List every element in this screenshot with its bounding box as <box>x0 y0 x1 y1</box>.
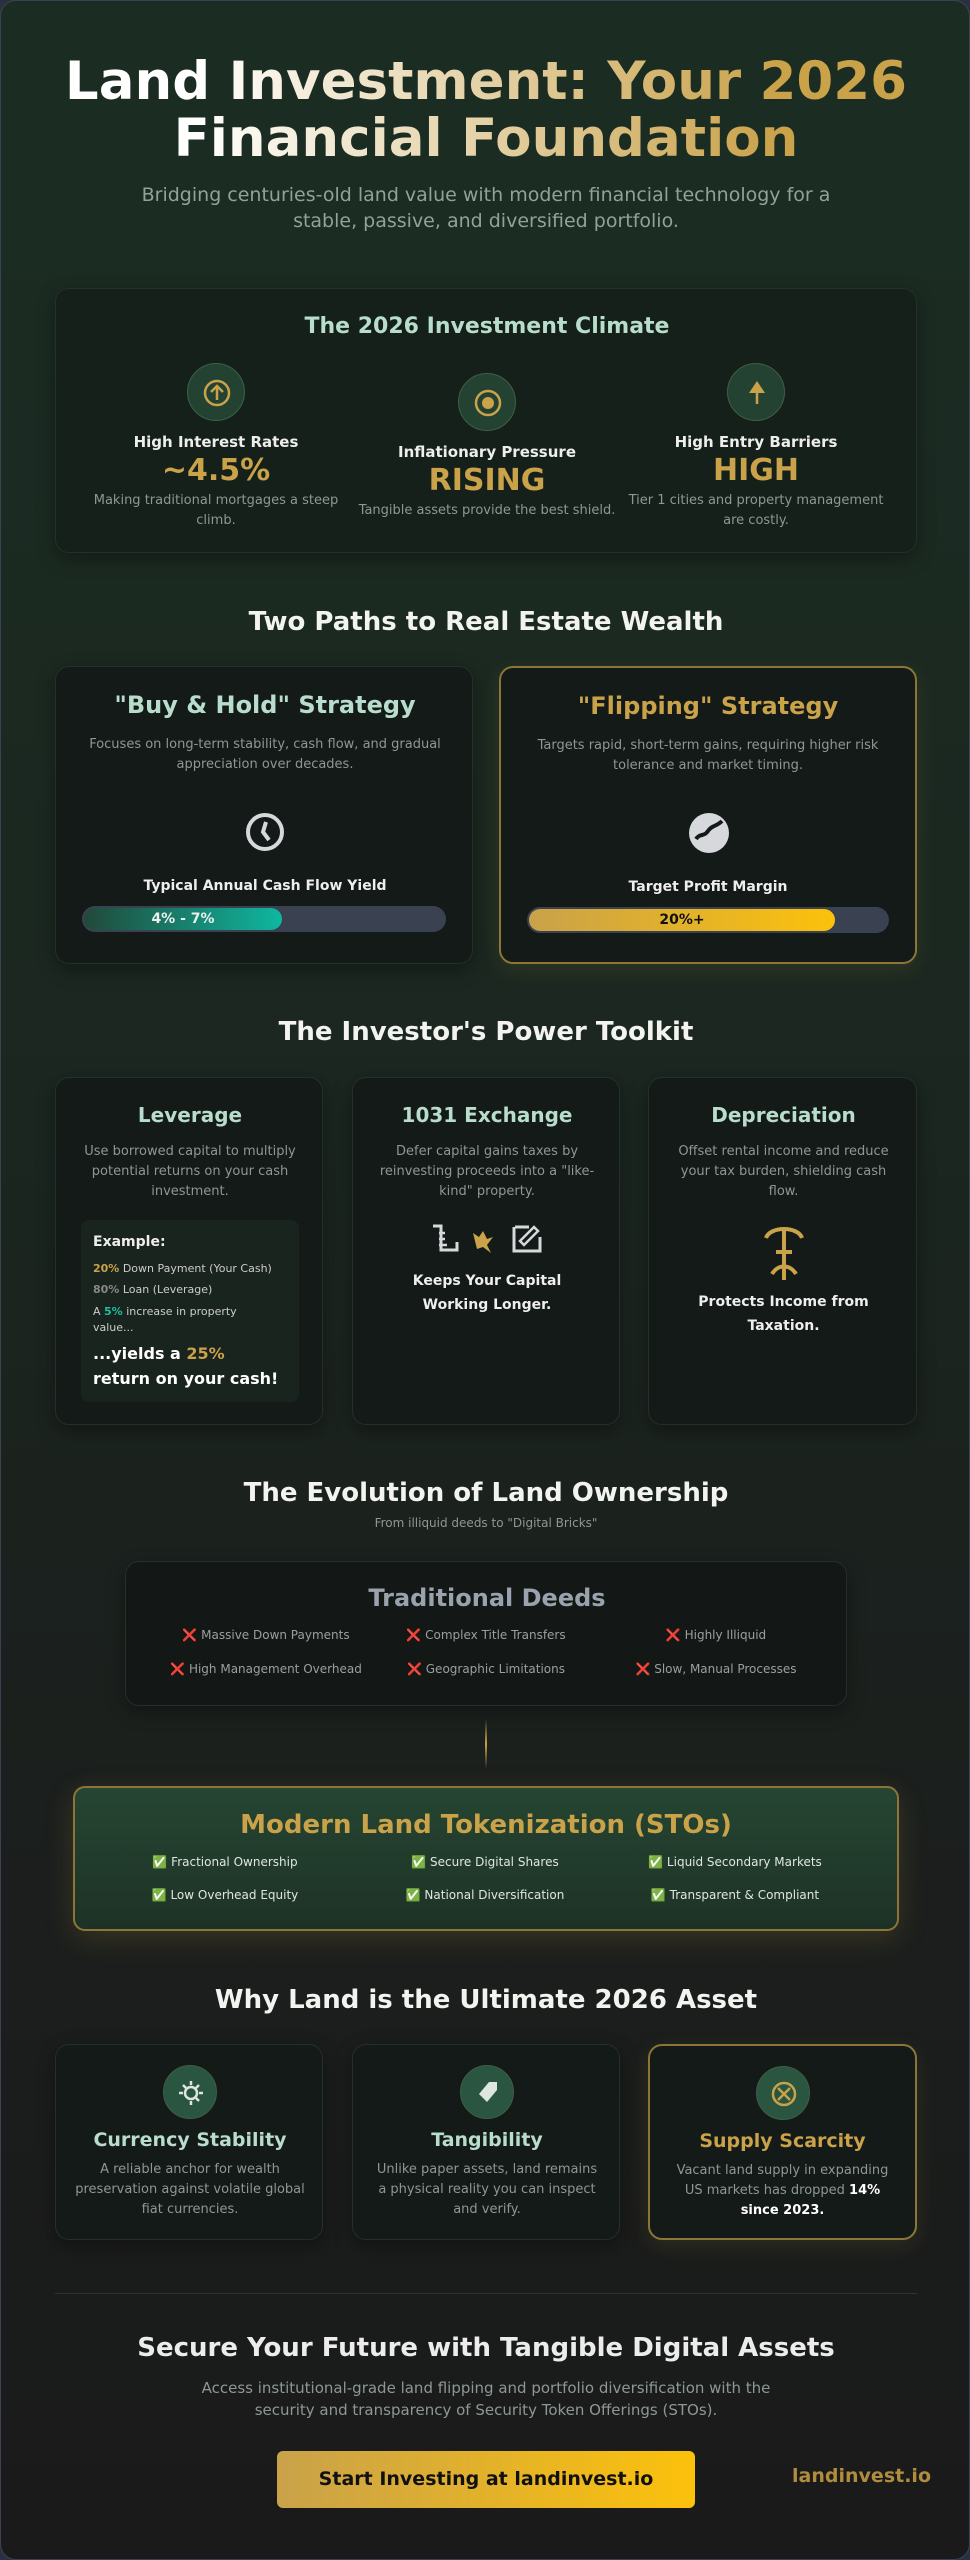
evolution subtitle: From illiquid deeds to "Digital Bricks" <box>375 1516 597 1530</box>
bar: cash flow yield: 4% - 7% <box>151 911 215 927</box>
example box: ...yields a 25% <box>93 1344 225 1363</box>
icon: arrow up circle <box>187 363 245 421</box>
panel: leverage: Use borrowed capital to multiply potential returns on your cash investment. <box>84 1144 296 1199</box>
panel: depreciation: Depreciation <box>711 1103 856 1127</box>
panel: 1031 exchange: Working Longer. <box>423 1297 551 1313</box>
climate item: entry barriers <box>628 363 884 528</box>
title: Financial Foundation <box>174 108 798 169</box>
example box: A 5% increase in property value... <box>93 1305 237 1334</box>
arrow: connector <box>485 1719 487 1769</box>
panel: traditional deeds: ❌ Geographic Limitations <box>407 1662 565 1676</box>
footer brand: landinvest.io <box>792 2465 931 2487</box>
panel: depreciation <box>648 1077 917 1425</box>
panel: buy & hold: Typical Annual Cash Flow Yield <box>143 878 387 894</box>
CTA description: Access institutional-grade land flipping and portfolio diversification with the security and transparency of Security Token Offerings (STOs). <box>202 2379 770 2419</box>
panel: traditional deeds: ❌ Massive Down Payments <box>182 1628 350 1642</box>
panel: flipping <box>499 666 917 964</box>
climate item: inflation: RISING <box>429 463 545 498</box>
panel: modern tokenization: ✅ Liquid Secondary Markets <box>648 1855 822 1869</box>
icon: tag <box>460 2065 514 2119</box>
panel: investment climate <box>55 288 917 553</box>
icon: clock <box>246 813 284 851</box>
panel: supply scarcity: Supply Scarcity <box>699 2130 866 2152</box>
panel: currency stability: A reliable anchor for wealth preservation against volatile global fiat currencies. <box>75 2162 305 2217</box>
climate item: interest rates: High Interest Rates <box>134 433 298 451</box>
panel: modern tokenization: ✅ Fractional Ownership <box>152 1855 298 1869</box>
example box: return on your cash! <box>93 1369 278 1388</box>
panel: modern tokenization: ✅ National Diversification <box>406 1888 564 1902</box>
example box: 20% Down Payment (Your Cash) <box>93 1262 272 1275</box>
panel: 1031 exchange: Keeps Your Capital <box>413 1273 561 1289</box>
bar: profit margin: 20%+ <box>659 912 705 928</box>
panel: tangibility: Tangibility <box>431 2129 543 2151</box>
panel: 1031 exchange: 1031 Exchange <box>402 1103 572 1127</box>
icon: tree <box>727 363 785 421</box>
example box: 80% Loan (Leverage) <box>93 1283 212 1296</box>
heading: toolkit: The Investor's Power Toolkit <box>279 1017 693 1047</box>
panel: modern tokenization: ✅ Secure Digital Shares <box>411 1855 559 1869</box>
panel: traditional deeds: ❌ Slow, Manual Processes <box>635 1662 797 1676</box>
climate item: interest rates: Making traditional mortgages a steep climb. <box>94 493 338 528</box>
bar: profit margin <box>527 907 889 933</box>
panel: flipping: Target Profit Margin <box>628 879 787 895</box>
icon: sun <box>163 2065 217 2119</box>
CTA button: Start Investing at landinvest.io <box>319 2468 653 2490</box>
climate item: inflation <box>358 373 615 518</box>
panel: traditional deeds: ❌ Highly Illiquid <box>666 1628 766 1642</box>
icon: chart circle <box>689 813 729 853</box>
panel: modern tokenization <box>73 1786 899 1931</box>
panel: depreciation: Protects Income from <box>698 1294 869 1310</box>
climate item: entry barriers: High Entry Barriers <box>675 433 837 451</box>
heading: why land: Why Land is the Ultimate 2026 Asset <box>215 1985 757 2015</box>
subtitle: Bridging centuries-old land value with modern financial technology for a stable, passive, and diversified portfolio. <box>142 184 830 232</box>
panel: buy & hold: "Buy & Hold" Strategy <box>114 691 416 719</box>
panel: traditional deeds: ❌ Complex Title Transfers <box>406 1628 566 1642</box>
panel: 1031 exchange: Defer capital gains taxes by reinvesting proceeds into a "like-kind" property. <box>380 1144 594 1199</box>
title: Land Investment: Your 2026 <box>65 51 907 112</box>
panel: supply scarcity <box>648 2044 917 2240</box>
icon: anchor <box>764 1227 804 1280</box>
panel: modern tokenization: ✅ Low Overhead Equity <box>152 1888 298 1902</box>
climate heading: The 2026 Investment Climate <box>304 314 669 339</box>
panel: currency stability: Currency Stability <box>93 2129 287 2151</box>
icon: exchange documents <box>433 1224 542 1253</box>
panel: leverage <box>55 1077 323 1425</box>
panel: traditional deeds: ❌ High Management Overhead <box>170 1662 362 1676</box>
panel: depreciation: Taxation. <box>747 1318 820 1334</box>
example box <box>81 1220 299 1402</box>
heading: two paths: Two Paths to Real Estate Wealth <box>249 607 723 637</box>
panel: currency stability <box>55 2044 323 2240</box>
example box: Example: <box>93 1234 166 1250</box>
icon: cross circle <box>756 2066 810 2120</box>
climate item: entry barriers: Tier 1 cities and property management are costly. <box>629 493 883 528</box>
heading: evolution: The Evolution of Land Ownership <box>244 1478 728 1508</box>
heading: CTA: Secure Your Future with Tangible Digital Assets <box>137 2333 835 2363</box>
climate item: inflation: Tangible assets provide the best shield. <box>359 503 615 518</box>
panel: flipping: Targets rapid, short-term gains, requiring higher risk tolerance and market timing. <box>538 738 878 773</box>
panel: supply scarcity: Vacant land supply in expanding US markets has dropped 14% since 2023. <box>677 2163 888 2218</box>
panel: modern tokenization: ✅ Transparent & Compliant <box>651 1888 819 1902</box>
panel: traditional deeds <box>125 1561 847 1706</box>
panel: flipping: "Flipping" Strategy <box>578 692 838 720</box>
panel: traditional deeds: Traditional Deeds <box>368 1584 606 1612</box>
CTA button <box>277 2451 695 2508</box>
panel: 1031 exchange <box>352 1077 620 1425</box>
climate item: entry barriers: HIGH <box>713 453 799 488</box>
title <box>1 53 970 167</box>
climate item: interest rates: ~4.5% <box>162 453 270 488</box>
bar: cash flow yield <box>82 906 446 932</box>
panel: buy & hold <box>55 666 473 964</box>
panel: tangibility <box>352 2044 620 2240</box>
panel: buy & hold: Focuses on long-term stability, cash flow, and gradual appreciation over decades. <box>89 737 441 772</box>
panel: leverage: Leverage <box>138 1103 242 1127</box>
icon: coin <box>458 373 516 431</box>
climate item: interest rates <box>94 363 338 528</box>
panel: modern tokenization: Modern Land Tokenization (STOs) <box>240 1810 732 1840</box>
panel: tangibility: Unlike paper assets, land remains a physical reality you can inspect and verify. <box>377 2162 597 2217</box>
panel: depreciation: Offset rental income and reduce your tax burden, shielding cash flow. <box>678 1144 889 1199</box>
climate item: inflation: Inflationary Pressure <box>398 443 576 461</box>
